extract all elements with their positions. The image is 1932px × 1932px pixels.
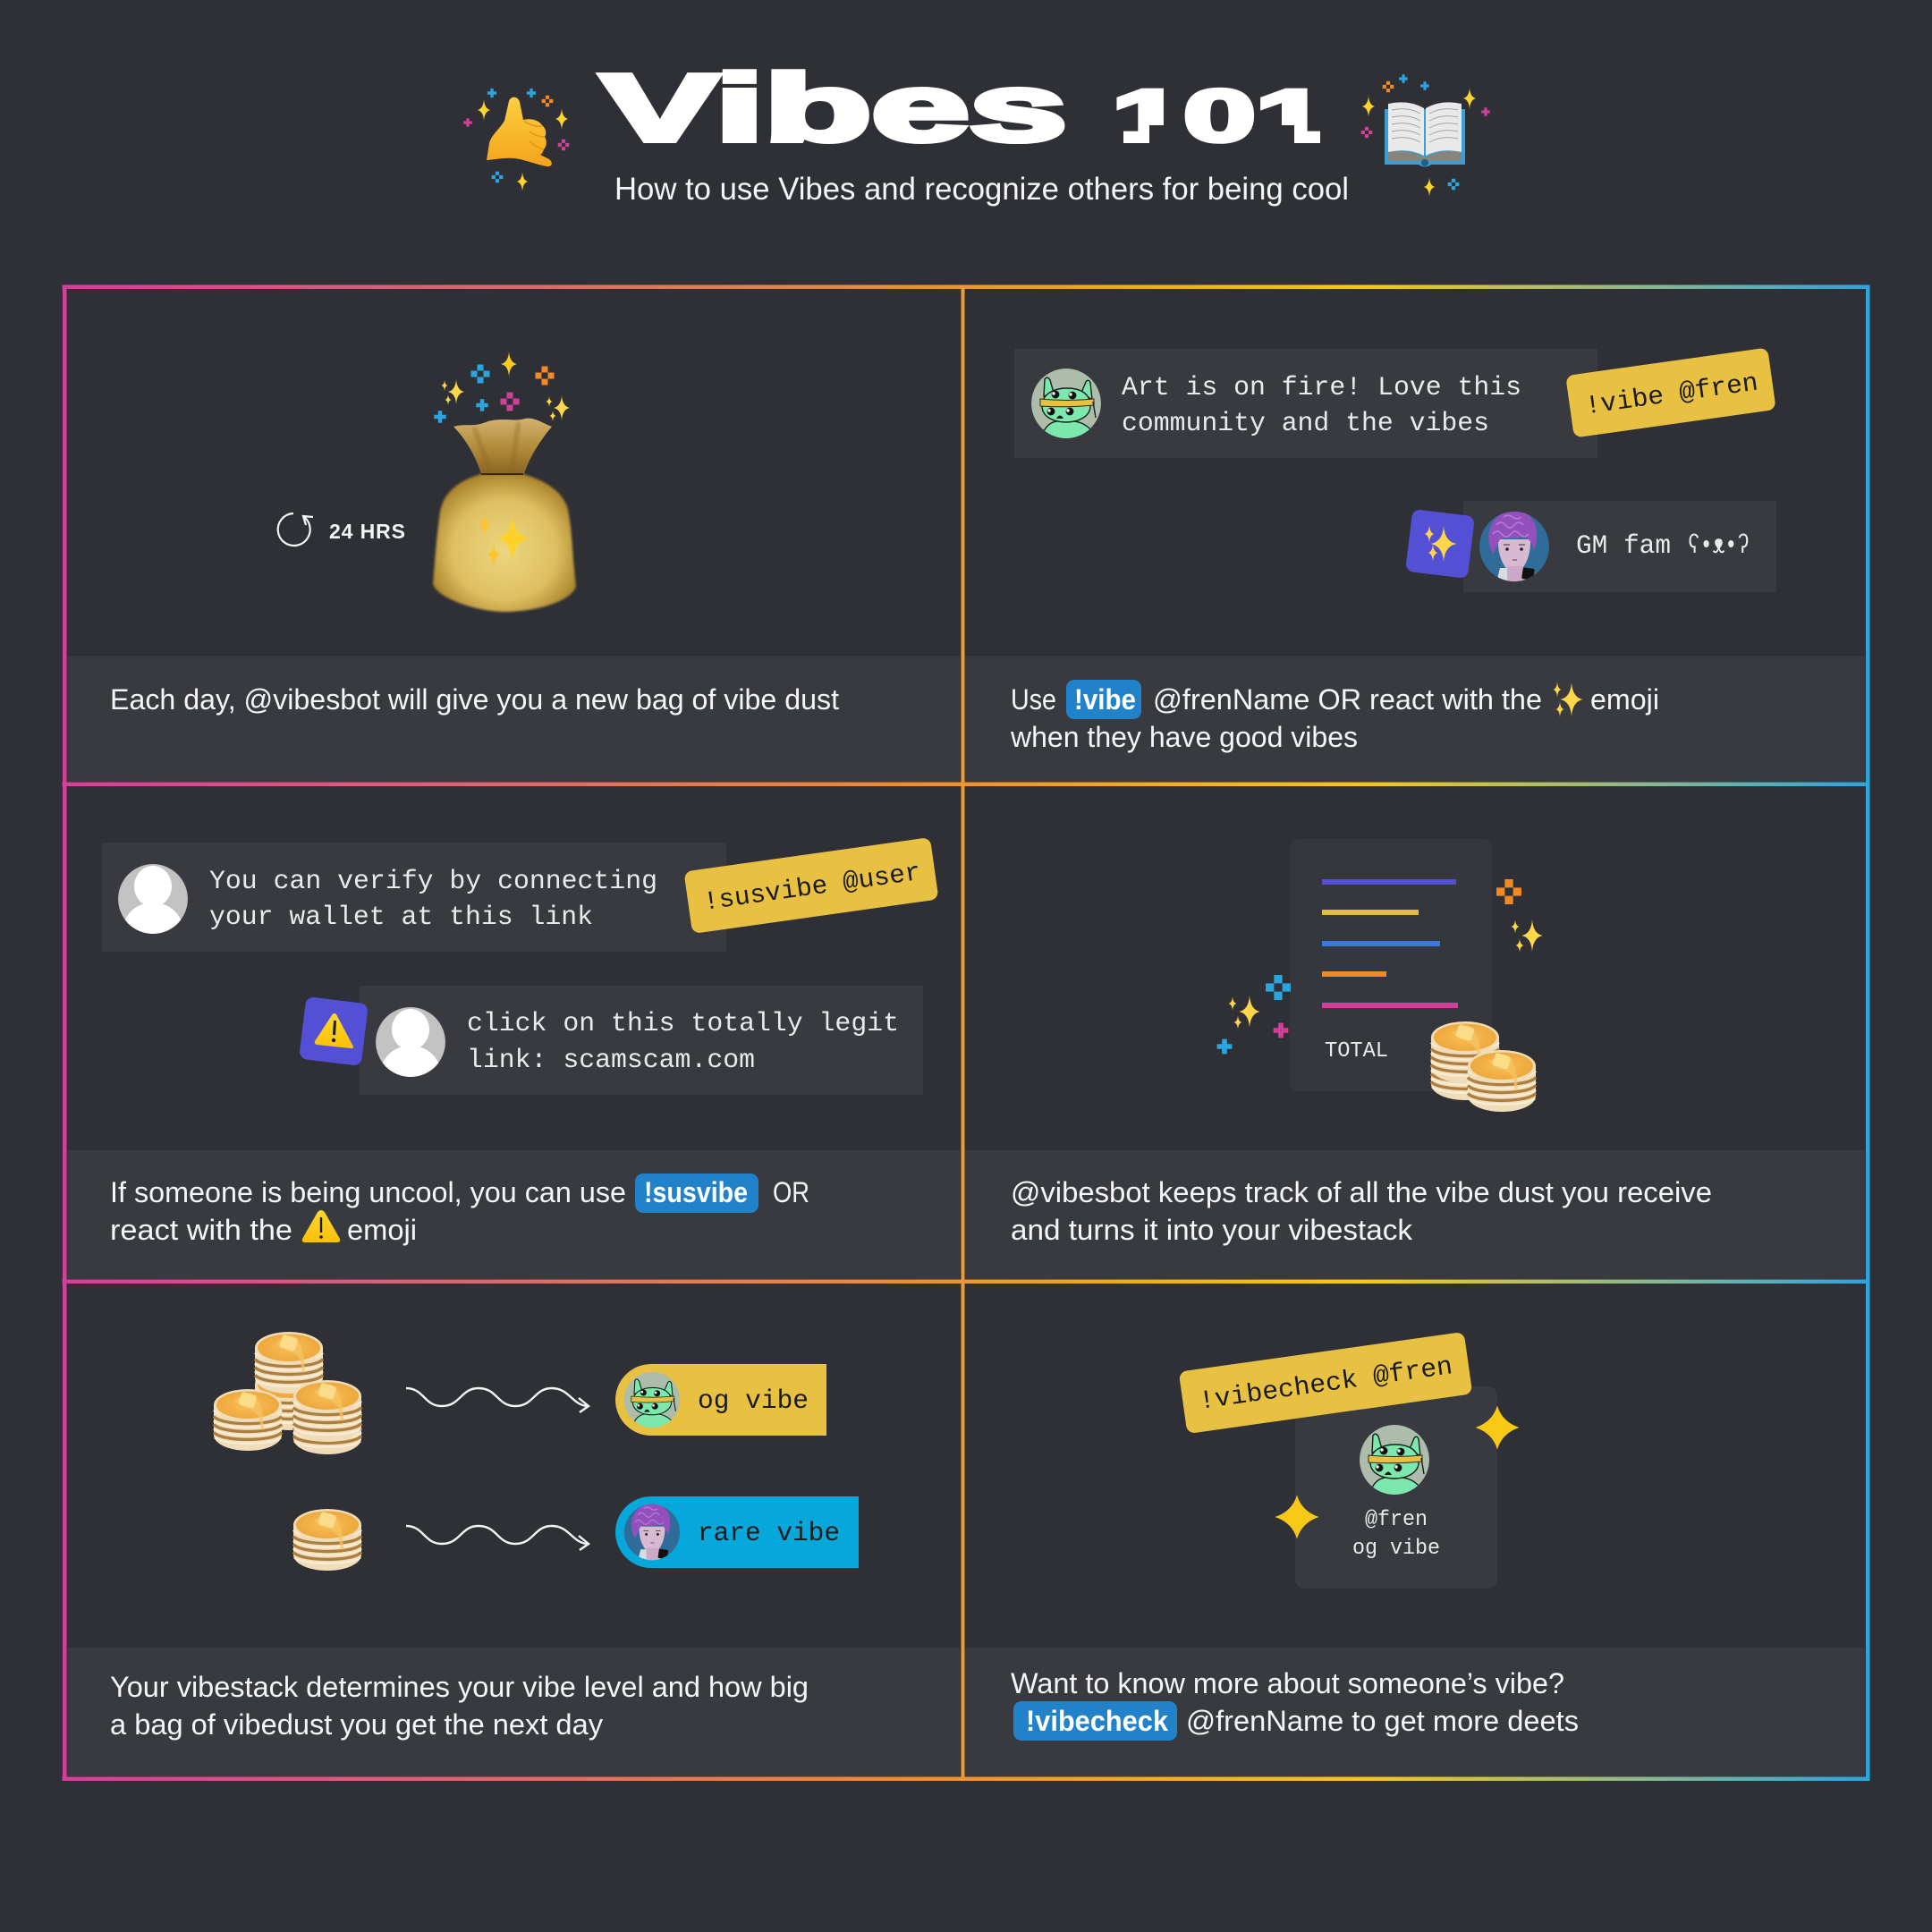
icon: pancake stacks xyxy=(1431,1021,1536,1112)
profile card: og vibe xyxy=(1352,1537,1440,1561)
icon: open book with sparkles xyxy=(1361,74,1490,197)
caption band xyxy=(965,656,1865,782)
caption band: Each day, @vibesbot will give you a new bag of vibe dust xyxy=(110,683,839,716)
reaction: warning tile xyxy=(299,996,369,1066)
panel: vibestack tracking xyxy=(965,787,1865,1279)
caption band: a bag of vibedust you get the next day xyxy=(110,1708,603,1741)
icon: large pancake pile xyxy=(214,1332,361,1454)
arrow: wavy to rare vibe xyxy=(406,1526,589,1550)
sparkles xyxy=(1217,879,1543,1054)
tag: vibe command xyxy=(1565,347,1776,438)
badge: rare vibe: rare vibe xyxy=(698,1519,840,1549)
tag: vibe command: !vibe @fren xyxy=(1583,368,1760,421)
panel: daily bag of vibe dust xyxy=(67,290,960,782)
caption band: @frenName to get more deets xyxy=(1186,1705,1579,1737)
reaction: sparkles tile xyxy=(1405,509,1475,579)
caption band: !vibecheck xyxy=(1026,1705,1168,1737)
caption band xyxy=(67,656,960,782)
caption band: Your vibestack determines your vibe level and how big xyxy=(110,1671,809,1703)
chat message: fren: Art is on fire! Love this xyxy=(1122,373,1521,403)
chat message: scam link: link: scamscam.com xyxy=(467,1046,755,1076)
badge: og vibe: og vibe xyxy=(698,1386,809,1417)
caption band: If someone is being uncool, you can use xyxy=(110,1176,626,1208)
icon: small pancake stack xyxy=(293,1509,361,1571)
profile card: @fren xyxy=(1365,1508,1428,1532)
chat message: GM fam: ʕ•ᴥ•ʔ xyxy=(1688,531,1750,562)
caption band: Use xyxy=(1011,683,1056,716)
arrow: wavy to og vibe xyxy=(406,1388,589,1412)
caption band: and turns it into your vibestack xyxy=(1011,1214,1413,1246)
caption band: emoji xyxy=(347,1214,417,1246)
chat message: scam link xyxy=(360,986,923,1103)
panel: vibe levels xyxy=(67,1284,960,1776)
caption band: @frenName OR react with the xyxy=(1153,683,1542,716)
subtitle: How to use Vibes and recognize others for being cool xyxy=(614,172,1349,207)
chat message: GM fam xyxy=(1463,501,1776,592)
chat message: verify wallet: your wallet at this link xyxy=(209,902,593,933)
tag: susvibe command: !susvibe @user xyxy=(701,858,922,918)
icon: refresh arrow xyxy=(278,513,313,546)
caption band: OR xyxy=(773,1176,809,1208)
grid frame xyxy=(63,284,1869,1781)
panel: vibecheck xyxy=(965,1284,1865,1776)
chat message: GM fam: GM fam xyxy=(1576,531,1671,562)
panel: susvibe xyxy=(67,787,960,1279)
caption band: !vibe xyxy=(1074,683,1136,716)
caption band: emoji xyxy=(1590,683,1659,716)
caption band xyxy=(67,1648,960,1776)
tag: vibecheck command: !vibecheck @fren xyxy=(1197,1352,1454,1417)
tag: susvibe command xyxy=(683,837,939,934)
badge: rare vibe xyxy=(615,1496,859,1568)
ledger card: TOTAL xyxy=(1325,1039,1388,1063)
caption band xyxy=(965,1648,1865,1776)
panel: use vibe command xyxy=(965,290,1865,782)
chat message: verify wallet: You can verify by connecting xyxy=(209,867,657,897)
chat message: fren xyxy=(1014,349,1597,458)
caption band xyxy=(965,1150,1865,1279)
tag: vibecheck command xyxy=(1179,1332,1472,1434)
icon: call-me hand with sparkles xyxy=(463,89,569,191)
caption band xyxy=(67,1150,960,1279)
caption band: !susvibe xyxy=(644,1176,748,1208)
chat message: verify wallet xyxy=(102,843,726,960)
icon: gold stars xyxy=(1275,1406,1519,1538)
caption band: when they have good vibes xyxy=(1010,721,1358,753)
24 hrs label: 24 HRS xyxy=(329,520,405,543)
profile card xyxy=(1295,1386,1497,1589)
caption band: @vibesbot keeps track of all the vibe dust you receive xyxy=(1011,1176,1712,1208)
icon: money bag with sparkles xyxy=(433,352,576,612)
ledger card xyxy=(1290,839,1492,1091)
chat message: fren: community and the vibes xyxy=(1122,409,1489,439)
title: 101 xyxy=(1112,75,1327,157)
chat message: scam link: click on this totally legit xyxy=(467,1009,899,1039)
title xyxy=(601,55,1343,161)
caption band: Want to know more about someone’s vibe? xyxy=(1011,1667,1564,1699)
badge: og vibe xyxy=(615,1364,826,1436)
caption band: react with the xyxy=(110,1214,292,1246)
title: Vibes xyxy=(601,55,1067,161)
